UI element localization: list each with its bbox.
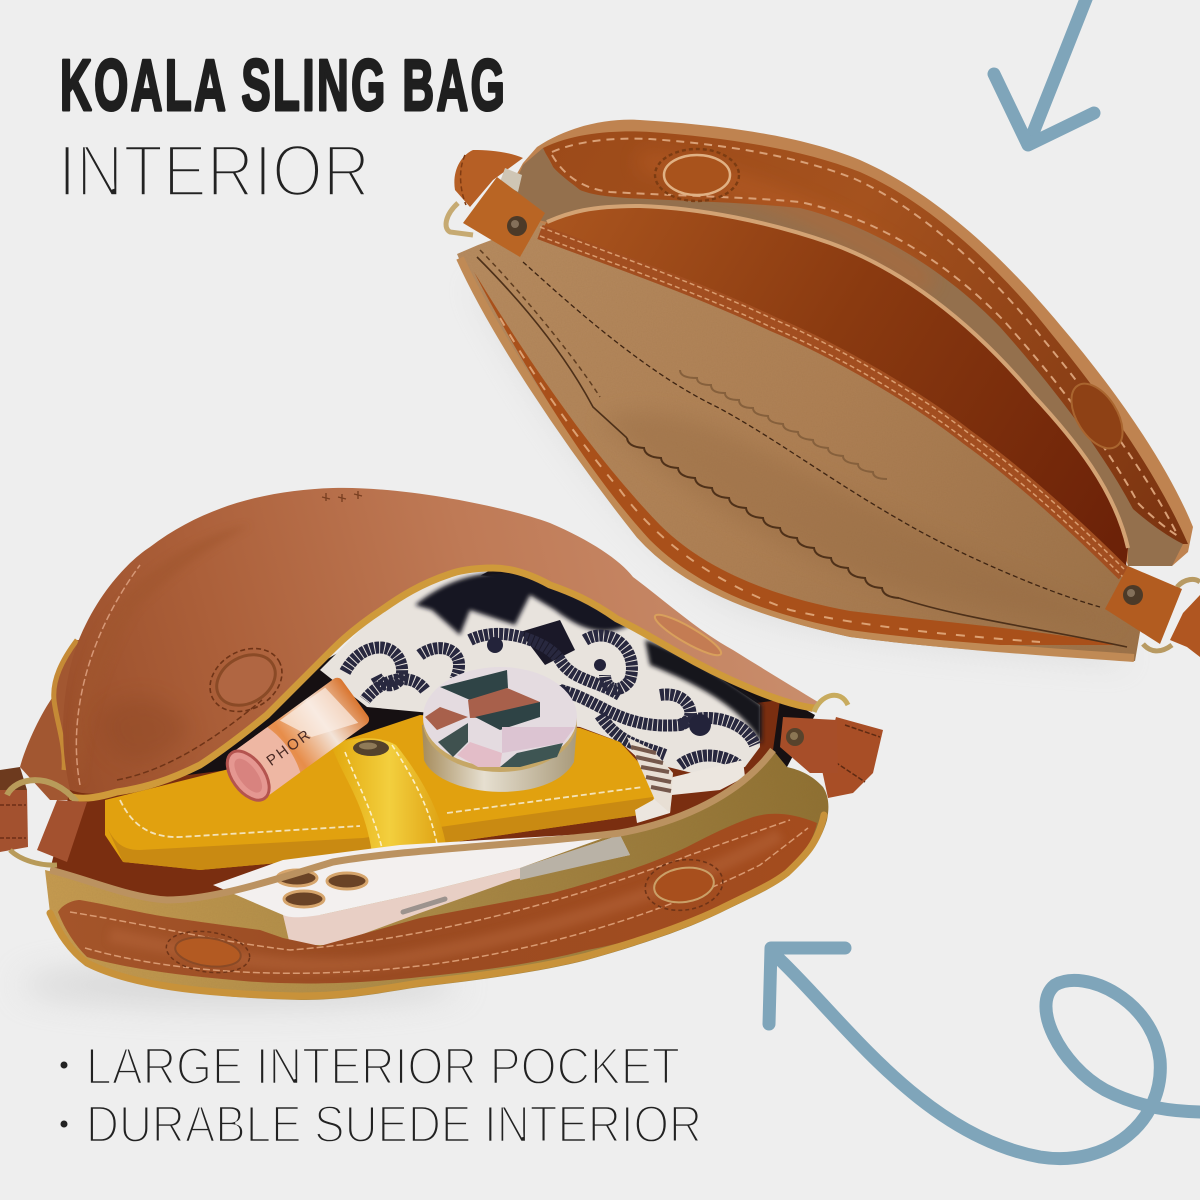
snap: back flap bbox=[664, 155, 730, 195]
fold line bbox=[477, 257, 1127, 647]
wallet clasp with snap bbox=[333, 738, 446, 853]
front flap bbox=[63, 488, 818, 794]
flap stitching bbox=[76, 565, 140, 785]
lower flap leather bbox=[58, 814, 817, 983]
darker suede shading bbox=[600, 412, 1120, 625]
lining lip bbox=[50, 750, 773, 900]
interior lining bbox=[50, 700, 780, 900]
flap rim bbox=[72, 568, 814, 798]
right strap bbox=[822, 717, 883, 798]
snap: flap right bbox=[1061, 375, 1133, 457]
maker marks bbox=[322, 491, 362, 502]
left strap and ring bbox=[0, 767, 27, 795]
dark interior bbox=[85, 565, 815, 870]
suede strip behind flap bbox=[510, 148, 1183, 566]
lower flap suede bbox=[45, 750, 828, 1000]
scalloped seams bbox=[680, 370, 887, 479]
bullet 1: LARGE INTERIOR POCKET bbox=[86, 1038, 680, 1096]
arrow: bottom right looping toward filled bag bbox=[769, 948, 1200, 1159]
upper silhouette rim bbox=[505, 120, 1193, 566]
yellow wallet bbox=[105, 715, 655, 870]
strap: top-left loop bbox=[454, 150, 523, 207]
snap: lower right bbox=[652, 864, 716, 906]
lower rim bbox=[460, 258, 1134, 658]
snap: front flap bbox=[208, 645, 284, 715]
thin stitching bbox=[523, 262, 1100, 607]
ground shadow bbox=[20, 963, 460, 1007]
flap stitching bbox=[552, 139, 1178, 536]
decorated tin bbox=[422, 667, 577, 792]
filled bag: bottom left bbox=[0, 488, 883, 1007]
glossy pocket bbox=[540, 206, 1128, 575]
snap: lower left bbox=[173, 934, 243, 970]
strap: bottom-right hardware bbox=[1170, 595, 1200, 657]
suede body bbox=[457, 222, 1140, 661]
bullet 2: DURABLE SUEDE INTERIOR bbox=[86, 1096, 702, 1154]
paisley motifs bbox=[345, 634, 755, 765]
phone bbox=[213, 832, 630, 945]
striped fabric corner bbox=[635, 760, 745, 823]
back left wing bbox=[20, 640, 100, 800]
lipstick tube: PHOR bbox=[264, 726, 315, 770]
lipstick tube bbox=[219, 675, 371, 808]
shadow bbox=[470, 280, 1130, 665]
flap leather bbox=[543, 131, 1188, 544]
arrow: top right pointing at open bag bbox=[994, 0, 1094, 145]
glossy lip lower-left bbox=[474, 272, 1120, 645]
stitched band bbox=[540, 232, 1124, 574]
bullet list bbox=[60, 1038, 702, 1154]
lower flap stitching bbox=[70, 820, 790, 950]
pocket lip bbox=[547, 206, 1128, 548]
open bag: top right bbox=[446, 120, 1200, 665]
title: KOALA SLING BAG bbox=[60, 45, 507, 126]
subtitle: INTERIOR bbox=[58, 131, 370, 212]
strap tab with rivet bbox=[463, 177, 545, 257]
scarf bbox=[320, 572, 762, 775]
lower flap edge bbox=[50, 815, 824, 996]
dark shadow areas bbox=[415, 572, 630, 635]
